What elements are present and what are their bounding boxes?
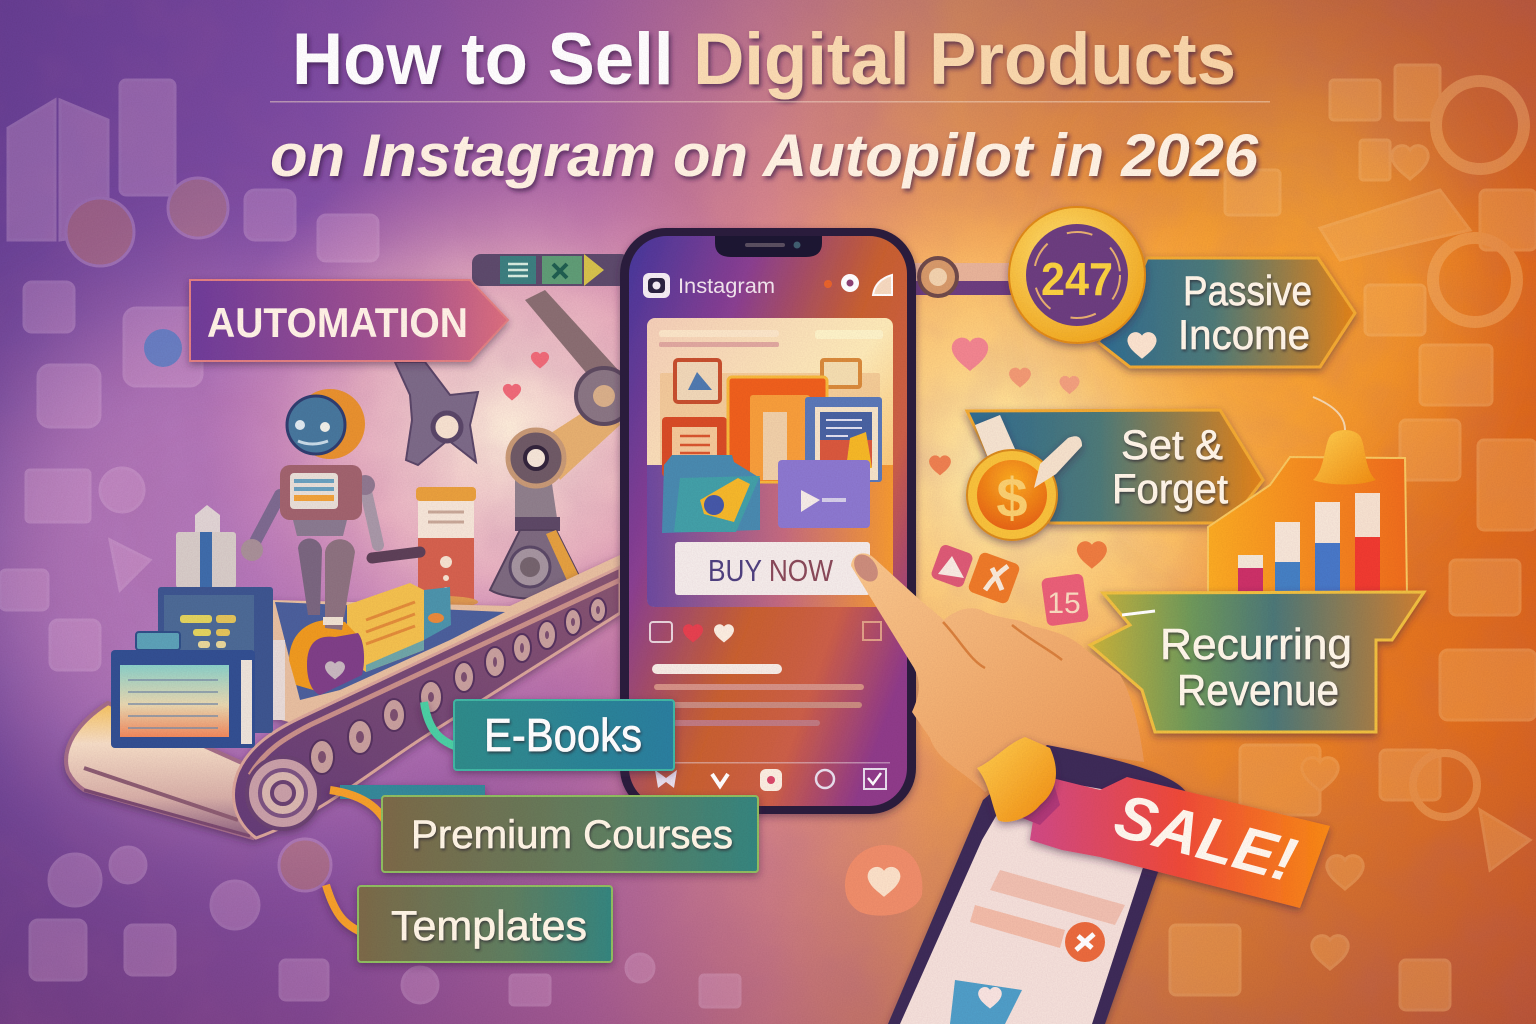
second phone (888, 745, 1186, 1024)
gift box (176, 505, 236, 588)
robotic arm: top connector (472, 254, 630, 286)
front book (111, 650, 255, 748)
automation label: AUTOMATION (207, 299, 468, 346)
dollar coin with pencil: $ (996, 466, 1028, 529)
conveyor belt (66, 555, 620, 838)
passive income label (1098, 258, 1355, 367)
robotic arm with gripper (395, 290, 632, 599)
robot orange base (289, 620, 362, 692)
title line 2: on Instagram on Autopilot in 2026 (270, 122, 1259, 189)
sale tag: SALE! (1108, 781, 1303, 896)
recurring revenue label: Recurring (1160, 620, 1352, 669)
passive income label: Passive (1183, 267, 1312, 314)
title line 1: How to Sell Digital Products (292, 19, 1236, 100)
pointing hand (849, 550, 1144, 792)
phone nav icons (650, 762, 890, 791)
lavender heart bubble (845, 845, 922, 916)
conveyor surface (170, 555, 620, 725)
instagram header (643, 273, 892, 298)
conveyor roller hubs (318, 606, 600, 763)
background icons: right side (1170, 65, 1536, 1010)
product folders (660, 360, 882, 533)
set and forget label (967, 410, 1263, 523)
robot arms (256, 495, 280, 540)
dollar coin with pencil (967, 415, 1082, 540)
buy now button (675, 542, 870, 595)
set and forget label: Forget (1112, 465, 1228, 512)
background icons: left side (0, 80, 740, 1007)
floating sticker icons (930, 543, 1089, 627)
conveyor rollers (310, 598, 606, 774)
bell on sale tag (977, 737, 1056, 822)
premium courses label (330, 785, 758, 872)
sale tag (1015, 770, 1330, 908)
recurring revenue label: Revenue (1177, 666, 1339, 715)
set and forget label: Set & (1121, 421, 1223, 468)
automation label (190, 280, 508, 361)
robot torso (280, 465, 362, 520)
conveyor left drum (66, 703, 300, 838)
phone (620, 228, 916, 814)
robot legs (298, 538, 322, 615)
floating sticker icons: 15 (1047, 587, 1081, 620)
templates label: Templates (391, 902, 587, 949)
e-books label: E-Books (484, 709, 642, 761)
yellow product box (347, 583, 451, 672)
decorative hearts (503, 338, 1107, 569)
buy now button: BUY NOW (708, 553, 834, 588)
title divider (270, 101, 1270, 102)
products on conveyor (111, 505, 451, 748)
bell (1313, 397, 1376, 484)
robot head (295, 389, 365, 459)
premium courses label: Premium Courses (411, 813, 733, 857)
background camera dot (144, 329, 182, 367)
instagram header: Instagram (678, 275, 775, 298)
e-books label (424, 700, 674, 770)
24/7 badge (1009, 207, 1145, 343)
robot (241, 389, 420, 695)
product post card (647, 318, 893, 607)
templates label (326, 885, 612, 962)
title (270, 19, 1270, 189)
caption lines (652, 664, 864, 726)
passive income label: Income (1178, 311, 1310, 358)
reactions (650, 622, 881, 643)
conveyor main roller (247, 757, 319, 829)
robot heart block (307, 633, 364, 695)
bar chart with bell (1208, 397, 1407, 595)
drink cup (410, 487, 478, 608)
right connector (905, 258, 1015, 296)
24/7 badge: 247 (1041, 253, 1113, 305)
conveyor belt side (234, 567, 620, 838)
blue book (136, 587, 285, 733)
recurring revenue label (1090, 592, 1424, 732)
